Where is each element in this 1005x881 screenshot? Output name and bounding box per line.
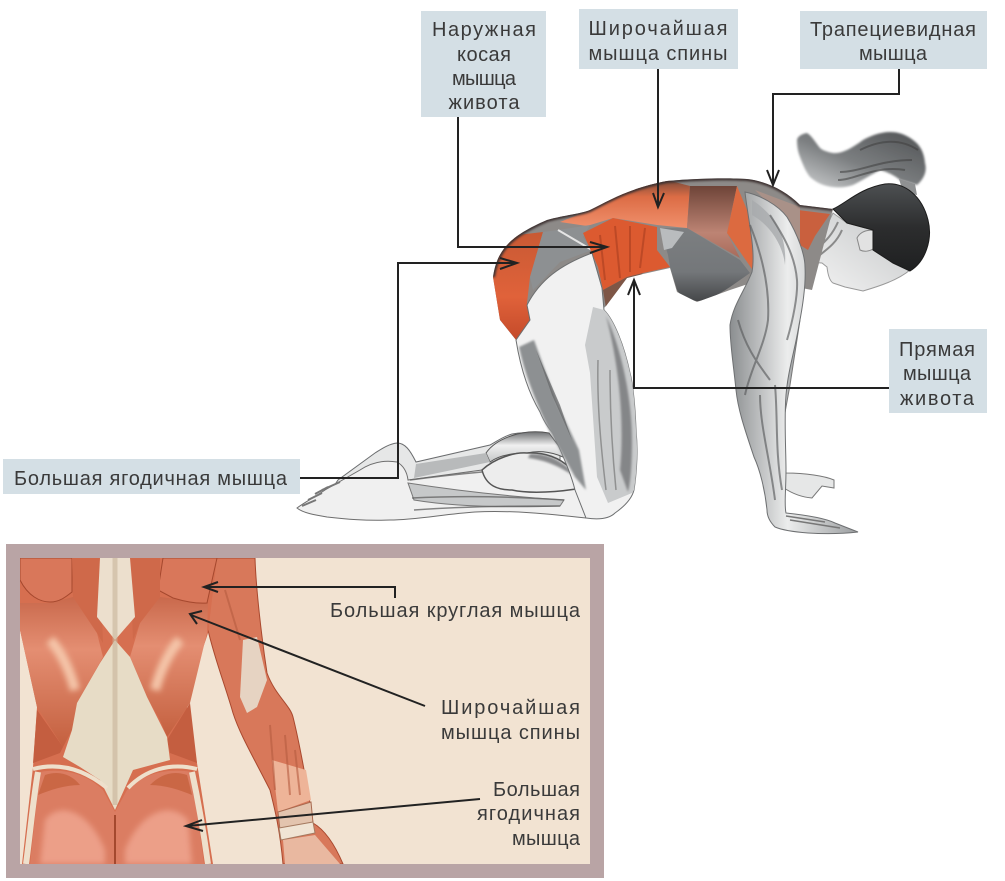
trapezius brown centre [687, 186, 740, 258]
breast [660, 228, 750, 301]
thigh [516, 253, 637, 519]
glute [493, 232, 543, 340]
inset panel: back muscles [6, 544, 604, 878]
label: rectus abdominis: живота [900, 388, 975, 410]
torso [20, 558, 217, 864]
label: gluteus maximus: Большая ягодичная мышца [14, 468, 288, 490]
label: external oblique: живота [448, 92, 520, 114]
waist band and ITB [33, 766, 197, 788]
spine strip [97, 558, 135, 640]
callout line: external oblique [458, 117, 607, 253]
label: external oblique: Наружная [432, 19, 536, 41]
rectus abdominis [603, 273, 643, 308]
label: trapezius [800, 11, 987, 69]
far arm [733, 280, 800, 440]
label: latissimus dorsi: Широчайшая [588, 18, 728, 40]
inset label: teres major: Большая круглая мышца [330, 600, 581, 622]
glutes [30, 771, 115, 864]
inset label: gluteus maximus: мышца [512, 828, 581, 850]
far leg and foot [330, 432, 569, 492]
label: latissimus dorsi: мышца спины [588, 43, 728, 65]
label: rectus abdominis [889, 329, 987, 413]
human figure in cat pose [297, 132, 929, 534]
head hair [833, 184, 929, 271]
oblique flanks [33, 703, 197, 763]
label: external oblique: косая [457, 44, 511, 66]
callout line: gluteus maximus [300, 258, 517, 478]
arm [208, 558, 343, 864]
latissimus [560, 180, 690, 228]
near leg and foot [297, 453, 596, 520]
near arm [730, 192, 858, 534]
oblique [583, 218, 670, 290]
callout line: latissimus [653, 69, 664, 207]
label: trapezius: Трапециевидная [810, 19, 976, 41]
label: rectus abdominis: Прямая [899, 339, 975, 361]
right latissimus [130, 597, 208, 737]
inset label: latissimus dorsi [441, 697, 580, 744]
label: gluteus maximus [3, 459, 300, 494]
label: latissimus dorsi [579, 9, 738, 69]
neck and face [805, 213, 910, 291]
callout line: rectus abdominis [628, 280, 889, 388]
label: trapezius: мышца [859, 43, 928, 65]
inset label: latissimus dorsi: Широчайшая [441, 697, 580, 719]
upper back pieces [20, 558, 72, 602]
dark back edge [493, 178, 833, 277]
ponytail [797, 132, 926, 195]
thoracolumbar fascia [63, 640, 170, 810]
neck red [798, 210, 830, 250]
inset arrow: gluteus maximus [186, 799, 480, 831]
inset label: gluteus maximus: Большая [493, 779, 580, 801]
inset label: gluteus maximus [477, 779, 581, 850]
inset arrow: teres major [204, 582, 395, 598]
torso muscles [493, 178, 833, 350]
far hand [782, 470, 834, 498]
lats near shoulder [727, 186, 754, 272]
inset label: latissimus dorsi: мышца спины [441, 722, 580, 744]
label: external oblique [421, 11, 546, 117]
label: external oblique: мышца [452, 68, 517, 90]
left latissimus [20, 597, 103, 747]
hip gray [530, 225, 592, 290]
callout line: trapezius [767, 69, 899, 185]
inset label: gluteus maximus: ягодичная [477, 803, 580, 825]
inset arrow: latissimus dorsi [190, 611, 425, 706]
label: rectus abdominis: мышца [903, 363, 972, 385]
